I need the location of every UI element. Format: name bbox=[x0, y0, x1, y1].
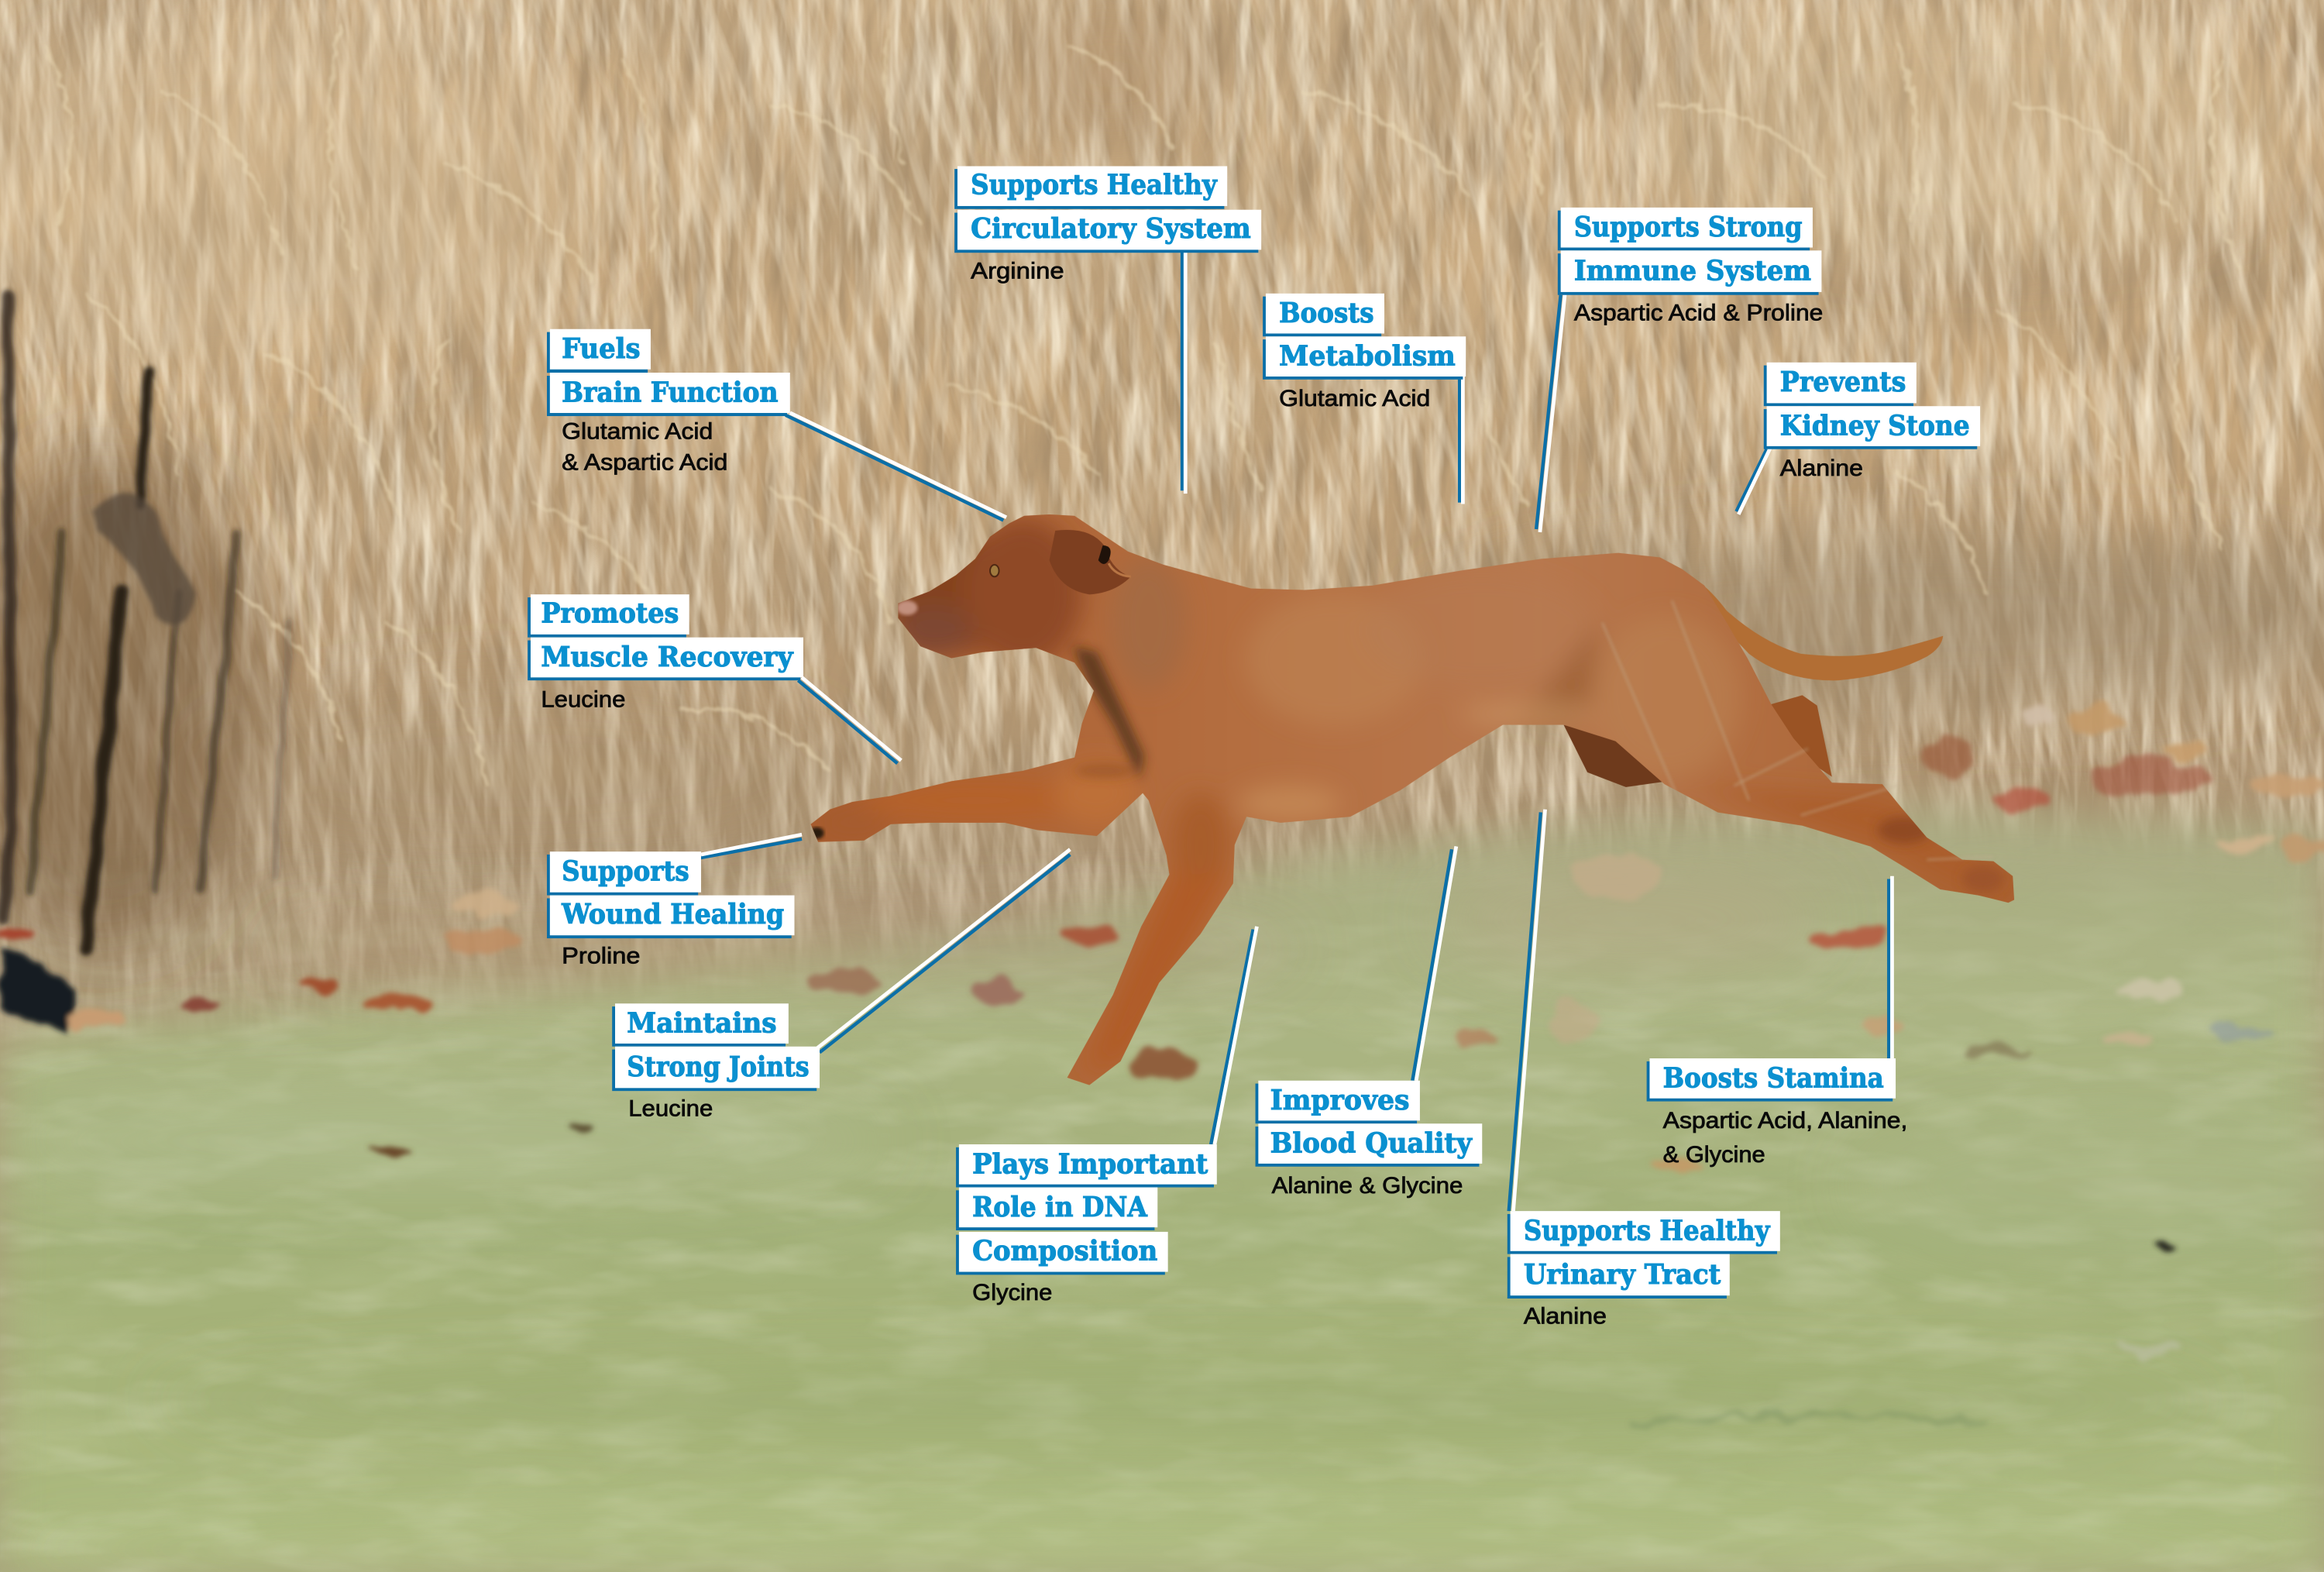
grass blades across hind leg bbox=[1602, 600, 1993, 860]
label: Fuels bbox=[547, 329, 651, 373]
amino acid: Leucine: Leucine bbox=[628, 1096, 713, 1122]
amino acids: Aspartic Acid, Alanine and Glycine: & Glycine bbox=[1663, 1142, 1765, 1168]
label: Muscle Recovery bbox=[528, 638, 803, 680]
label: Strong Joints: Strong Joints bbox=[627, 1051, 810, 1083]
label: Supports Healthy bbox=[1508, 1211, 1780, 1254]
label: Boosts Stamina: Boosts Stamina bbox=[1663, 1062, 1884, 1094]
label: Boosts Stamina bbox=[1647, 1058, 1896, 1102]
label: Blood Quality bbox=[1256, 1123, 1482, 1167]
ear bbox=[1050, 530, 1131, 594]
leader line bbox=[1182, 249, 1185, 494]
fence posts on the left bbox=[3, 297, 289, 948]
amino acid: Alanine: Alanine bbox=[1780, 456, 1863, 481]
label: Brain Function: Brain Function bbox=[562, 377, 778, 408]
label: Fuels: Fuels bbox=[562, 333, 641, 365]
label: Composition: Composition bbox=[972, 1235, 1157, 1267]
label: Supports Healthy: Supports Healthy bbox=[971, 170, 1218, 201]
label: Supports Healthy: Supports Healthy bbox=[1524, 1215, 1771, 1247]
leader line bbox=[1536, 292, 1565, 532]
callout: metabolism bbox=[1263, 294, 1466, 504]
label: Improves bbox=[1256, 1081, 1420, 1123]
dog body bbox=[800, 504, 2030, 1097]
label: Prevents: Prevents bbox=[1780, 366, 1906, 398]
leader line bbox=[817, 849, 1070, 1052]
callout: kidney stone bbox=[1736, 363, 1980, 514]
label: Maintains bbox=[612, 1003, 789, 1047]
amino acid: Proline: Proline bbox=[562, 944, 641, 969]
amino acids: Glutamic Acid and Aspartic Acid bbox=[562, 418, 727, 475]
callout: muscle recovery bbox=[528, 594, 901, 763]
label: Wound Healing bbox=[547, 896, 795, 938]
label: Immune System bbox=[1558, 250, 1821, 295]
leader line bbox=[1736, 446, 1771, 514]
callout: strong joints bbox=[612, 849, 1070, 1122]
leader line bbox=[1211, 927, 1257, 1144]
amino acids: Aspartic Acid, Alanine and Glycine bbox=[1663, 1108, 1907, 1168]
label: Brain Function bbox=[547, 373, 790, 416]
callout: DNA composition bbox=[956, 927, 1257, 1305]
amino acids: Aspartic Acid and Proline: Aspartic Acid & Proline bbox=[1574, 300, 1823, 325]
label: Circulatory System: Circulatory System bbox=[971, 213, 1251, 245]
label: Supports bbox=[547, 851, 701, 896]
leader line bbox=[786, 413, 1006, 521]
label: Maintains: Maintains bbox=[627, 1008, 777, 1040]
amino acids: Glutamic Acid and Aspartic Acid: Glutamic Acid bbox=[562, 418, 713, 444]
callout: immune system bbox=[1536, 208, 1823, 532]
eye bbox=[990, 565, 999, 576]
label: Blood Quality: Blood Quality bbox=[1270, 1128, 1473, 1160]
callout: brain function bbox=[547, 329, 1006, 521]
label: Urinary Tract: Urinary Tract bbox=[1524, 1259, 1721, 1291]
callout: stamina bbox=[1647, 876, 1907, 1168]
amino acid: Glutamic Acid: Glutamic Acid bbox=[1279, 386, 1430, 411]
dog bbox=[800, 504, 2030, 1097]
amino acids: Aspartic Acid, Alanine and Glycine: Aspartic Acid, Alanine, bbox=[1663, 1108, 1907, 1133]
leader line bbox=[1509, 810, 1545, 1211]
callout: urinary tract bbox=[1508, 810, 1780, 1329]
label: Boosts bbox=[1263, 294, 1384, 336]
leader line bbox=[798, 677, 901, 763]
label: Supports Strong: Supports Strong bbox=[1574, 212, 1803, 243]
label: Plays Important: Plays Important bbox=[972, 1148, 1208, 1180]
label: Prevents bbox=[1764, 363, 1917, 406]
label: Muscle Recovery: Muscle Recovery bbox=[541, 642, 794, 673]
leader line bbox=[1412, 846, 1456, 1081]
callout: circulatory system bbox=[954, 166, 1261, 494]
label: Immune System: Immune System bbox=[1574, 256, 1811, 287]
amino acid: Alanine: Alanine bbox=[1524, 1304, 1607, 1329]
label: Plays Important bbox=[956, 1144, 1217, 1188]
amino acids: Alanine and Glycine: Alanine & Glycine bbox=[1272, 1173, 1463, 1199]
label: Role in DNA bbox=[956, 1188, 1157, 1230]
amino acid: Arginine: Arginine bbox=[971, 259, 1064, 284]
amino acid: Glycine: Glycine bbox=[972, 1280, 1052, 1305]
amino acids: Glutamic Acid and Aspartic Acid: & Aspartic Acid bbox=[562, 449, 727, 475]
label: Composition bbox=[956, 1232, 1168, 1274]
label: Kidney Stone bbox=[1764, 406, 1980, 449]
label: Kidney Stone: Kidney Stone bbox=[1780, 411, 1970, 442]
label: Role in DNA: Role in DNA bbox=[972, 1192, 1148, 1223]
label: Wound Healing: Wound Healing bbox=[561, 899, 784, 930]
callout: blood quality bbox=[1256, 846, 1482, 1199]
label: Metabolism bbox=[1263, 336, 1466, 380]
fallen leaves and black object on the ground bbox=[0, 706, 2324, 1423]
label: Boosts: Boosts bbox=[1279, 298, 1374, 329]
label: Promotes: Promotes bbox=[541, 598, 679, 630]
callout: wound healing bbox=[547, 834, 802, 969]
tail bbox=[1679, 569, 1943, 680]
label: Metabolism: Metabolism bbox=[1279, 341, 1456, 373]
far hind leg bbox=[1563, 725, 1667, 787]
label: Urinary Tract bbox=[1508, 1254, 1730, 1299]
leader line bbox=[698, 834, 802, 858]
far hind paw bbox=[1767, 695, 1832, 777]
label: Circulatory System bbox=[954, 210, 1261, 253]
label: Supports: Supports bbox=[562, 855, 689, 887]
label: Improves: Improves bbox=[1270, 1085, 1410, 1116]
leader line bbox=[1459, 377, 1463, 504]
label: Promotes bbox=[528, 594, 689, 638]
label: Supports Healthy bbox=[954, 166, 1227, 209]
leader line bbox=[1889, 876, 1892, 1058]
amino acid: Leucine: Leucine bbox=[541, 687, 625, 713]
label: Supports Strong bbox=[1558, 208, 1813, 250]
label: Strong Joints bbox=[612, 1047, 820, 1091]
